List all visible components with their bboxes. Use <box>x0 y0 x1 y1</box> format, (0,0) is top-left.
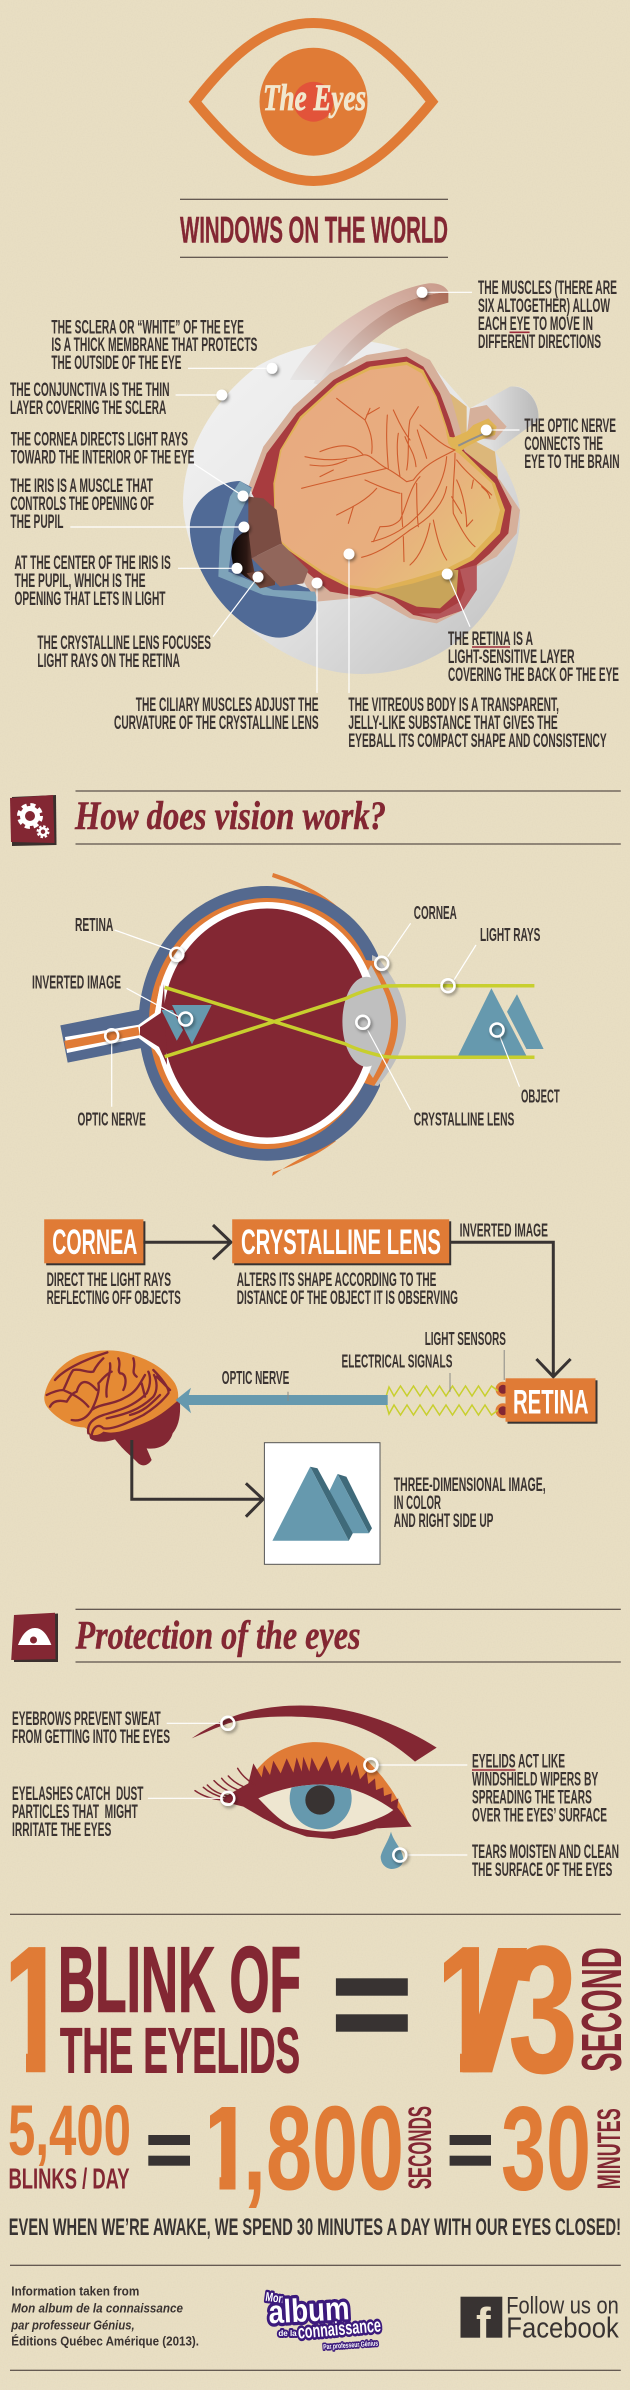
label: eyelids <box>472 1752 607 1827</box>
footer: album logo: album <box>267 2289 350 2330</box>
outer layer <box>248 348 520 623</box>
optic nerve arrow <box>176 1388 388 1413</box>
label: eyebrows <box>12 1709 170 1748</box>
diagram labels: RETINA <box>75 915 113 935</box>
outer lashes <box>195 1768 255 1800</box>
diagram labels: INVERTED IMAGE <box>32 972 121 992</box>
eye white <box>258 1784 393 1832</box>
liner with lashes <box>223 1756 412 1839</box>
label: pupil: THE PUPIL, WHICH IS THE <box>14 571 146 592</box>
stat: daily blinks <box>10 2104 620 2208</box>
label: crystalline lens: LIGHT RAYS ON THE RETINA <box>37 651 180 672</box>
stat: daily blinks: 1 <box>196 2081 256 2215</box>
stat: daily blinks: ,800 <box>243 2081 404 2215</box>
translucent sheath <box>450 393 498 480</box>
logo: eye with The Eyes <box>195 23 432 181</box>
lens <box>252 543 308 587</box>
diagram: eye cross-section <box>32 873 560 1176</box>
box: cornea <box>44 1219 145 1265</box>
label: conjunctiva: LAYER COVERING THE SCLERA <box>10 398 166 419</box>
icon: brain <box>44 1350 180 1465</box>
anatomy markers <box>216 287 492 588</box>
heading: how does vision work <box>10 791 621 846</box>
labels: signals: LIGHT SENSORS <box>425 1329 506 1349</box>
upper lid <box>248 1742 408 1823</box>
illustration: eye with brow and lashes <box>192 1705 437 1869</box>
optic nerve tube casing <box>470 387 538 452</box>
stat: one blink: 1 <box>429 1907 507 2111</box>
label: retina <box>448 629 619 686</box>
diagram labels: OPTIC NERVE <box>78 1110 146 1130</box>
outer wall <box>139 886 380 1161</box>
retina rim <box>273 362 505 592</box>
label: muscles <box>478 278 617 353</box>
footer: source <box>10 2285 199 2349</box>
text: lens description <box>237 1270 458 1309</box>
label: pupil <box>14 553 171 610</box>
vitreous <box>163 908 371 1138</box>
stat: one blink: BLINK OF <box>58 1928 301 2032</box>
ciliary muscle <box>247 570 275 588</box>
iris and pupil <box>290 1784 352 1830</box>
optic nerve <box>64 984 167 1065</box>
label: cornea <box>11 430 194 469</box>
label: eyebrows: EYEBROWS PREVENT SWEAT <box>12 1709 161 1730</box>
diagram labels: CORNEA <box>414 903 457 923</box>
text: lens description: ALTERS ITS SHAPE ACCORDING TO THE <box>237 1270 436 1291</box>
label: ciliary muscles: THE CILIARY MUSCLES ADJUST THE <box>136 695 319 716</box>
footer: source: Mon album de la connaissance <box>11 2302 183 2316</box>
label: iris: CONTROLS THE OPENING OF <box>10 494 154 515</box>
box: cornea: CORNEA <box>52 1223 137 1262</box>
iris <box>248 497 282 558</box>
cornea blue <box>190 481 318 638</box>
footer: source: Information taken from <box>11 2285 139 2299</box>
sclera <box>183 340 538 674</box>
text: image description <box>394 1475 546 1532</box>
white layer <box>155 902 379 1144</box>
protection leader lines <box>148 1723 467 1855</box>
box: three-dimensional image <box>264 1443 380 1564</box>
rule above stats <box>10 1913 621 1915</box>
cornea <box>372 955 406 1086</box>
orange layer <box>149 898 398 1149</box>
panel: eye anatomy illustration <box>183 283 538 674</box>
stat: one blink: / <box>460 1918 530 2105</box>
footer: source: Éditions Québec Amérique (2013). <box>11 2334 199 2349</box>
diagram markers <box>105 948 503 1042</box>
box: retina <box>496 1378 598 1424</box>
footer: album logo: connaissance <box>297 2315 382 2344</box>
footer: facebook: f <box>476 2299 491 2348</box>
cornea light band <box>218 481 318 602</box>
eyelids arcs <box>272 873 338 1176</box>
light rays <box>165 986 534 1057</box>
label: sclera: THE OUTSIDE OF THE EYE <box>51 353 181 374</box>
logo: eye with The Eyes: The Eyes <box>263 78 366 119</box>
muscle <box>290 283 448 387</box>
footer: album logo: Mon <box>265 2290 285 2306</box>
footer: source: par professeur Génius, <box>10 2319 135 2333</box>
label: cornea: TOWARD THE INTERIOR OF THE EYE <box>11 448 194 469</box>
text: cornea description: REFLECTING OFF OBJECTS <box>47 1288 181 1309</box>
label: sclera: IS A THICK MEMBRANE THAT PROTECTS <box>51 335 257 356</box>
footer: album logo <box>265 2289 382 2351</box>
leader ticks <box>288 1350 504 1401</box>
label: sclera: THE SCLERA OR “WHITE” OF THE EYE <box>51 317 244 338</box>
arrow: brain to image <box>132 1440 263 1517</box>
label: eyelashes: IRRITATE THE EYES <box>12 1820 111 1841</box>
labels: signals <box>222 1329 506 1388</box>
label: pupil: OPENING THAT LETS IN LIGHT <box>14 589 166 610</box>
footer: facebook <box>460 2292 619 2348</box>
label: eyelashes <box>12 1784 144 1841</box>
label: crystalline lens: THE CRYSTALLINE LENS FOCUSES <box>37 633 211 654</box>
diagram labels: LIGHT RAYS <box>480 925 540 945</box>
label: crystalline lens <box>37 633 211 672</box>
lower lobe <box>377 565 477 619</box>
rule above footer <box>10 2264 621 2266</box>
heading: how does vision work: How does vision work? <box>74 793 386 838</box>
label: vitreous body <box>348 695 607 752</box>
stat: daily blinks: SECONDS <box>401 2106 438 2189</box>
pupil <box>231 530 257 583</box>
footer: album logo: Par professeur Génius <box>323 2339 378 2351</box>
nerve sheath <box>467 405 507 440</box>
anatomy leader lines <box>70 292 520 693</box>
flow diagram <box>44 1219 597 1564</box>
label: eyebrows: FROM GETTING INTO THE EYES <box>12 1727 170 1748</box>
diagram labels <box>32 903 560 1130</box>
stat: daily blinks: MINUTES <box>590 2108 627 2189</box>
text: cornea description: DIRECT THE LIGHT RAYS <box>47 1270 171 1291</box>
diagram labels: OBJECT <box>521 1087 560 1107</box>
label: inverted image: INVERTED IMAGE <box>460 1221 548 1241</box>
inverted image <box>162 1005 212 1044</box>
label: ciliary muscles <box>114 695 319 734</box>
label: cornea: THE CORNEA DIRECTS LIGHT RAYS <box>11 430 188 451</box>
electrical signals zigzag <box>385 1386 498 1415</box>
labels: signals: ELECTRICAL SIGNALS <box>342 1352 452 1372</box>
label: ciliary muscles: CURVATURE OF THE CRYSTALLINE LENS <box>114 713 319 734</box>
tear <box>381 1832 403 1869</box>
protection markers <box>221 1717 406 1862</box>
label: pupil: AT THE CENTER OF THE IRIS IS <box>14 553 171 574</box>
label: conjunctiva <box>10 380 170 419</box>
label: tears <box>472 1842 619 1881</box>
rule below footer <box>10 2369 621 2371</box>
footer: album logo: de la <box>278 2328 297 2338</box>
box: crystalline lens: CRYSTALLINE LENS <box>241 1223 441 1262</box>
diagram labels: CRYSTALLINE LENS <box>414 1110 514 1130</box>
label: optic nerve <box>524 416 620 473</box>
arrow: lens to retina <box>451 1242 571 1377</box>
icon: gears <box>10 795 56 846</box>
diagram leader lines <box>112 923 519 1110</box>
stat: daily blinks: BLINKS / DAY <box>8 2163 130 2195</box>
box: crystalline lens <box>232 1219 451 1265</box>
heading: protection of the eyes: Protection of the eyes <box>75 1612 360 1657</box>
optic nerve tube <box>448 418 497 453</box>
label: conjunctiva: THE CONJUNCTIVA IS THE THIN <box>10 380 170 401</box>
object triangles <box>458 988 544 1056</box>
labels: signals: OPTIC NERVE <box>222 1368 289 1388</box>
label: iris: THE IRIS IS A MUSCLE THAT <box>10 476 153 497</box>
arrow: cornea to lens <box>143 1225 231 1259</box>
footer: facebook: Facebook <box>506 2312 619 2344</box>
text: cornea description <box>47 1270 181 1309</box>
label: iris: THE PUPIL <box>10 512 64 533</box>
label: iris <box>10 476 154 533</box>
stat: daily blinks: 5,400 <box>8 2092 131 2171</box>
label: eyelashes: EYELASHES CATCH DUST <box>12 1784 144 1805</box>
red layer <box>252 357 512 619</box>
retinal veins <box>302 398 492 565</box>
stat: one blink: 3 <box>508 1907 578 2111</box>
icon: eye dome <box>11 1613 58 1662</box>
label: retina: THE RETINA IS A <box>448 629 533 650</box>
label: sclera <box>51 317 257 374</box>
stat: one blink <box>10 1945 622 2074</box>
label: eyelashes: PARTICLES THAT MIGHT <box>12 1802 138 1823</box>
eyebrow <box>192 1705 437 1762</box>
text: image description: AND RIGHT SIDE UP <box>394 1511 494 1532</box>
crystalline lens <box>342 977 390 1067</box>
vitreous body <box>275 365 500 588</box>
heading: protection of the eyes <box>11 1609 621 1662</box>
text: image description: IN COLOR <box>394 1493 441 1514</box>
stat: one blink: THE EYELIDS <box>60 2014 300 2086</box>
